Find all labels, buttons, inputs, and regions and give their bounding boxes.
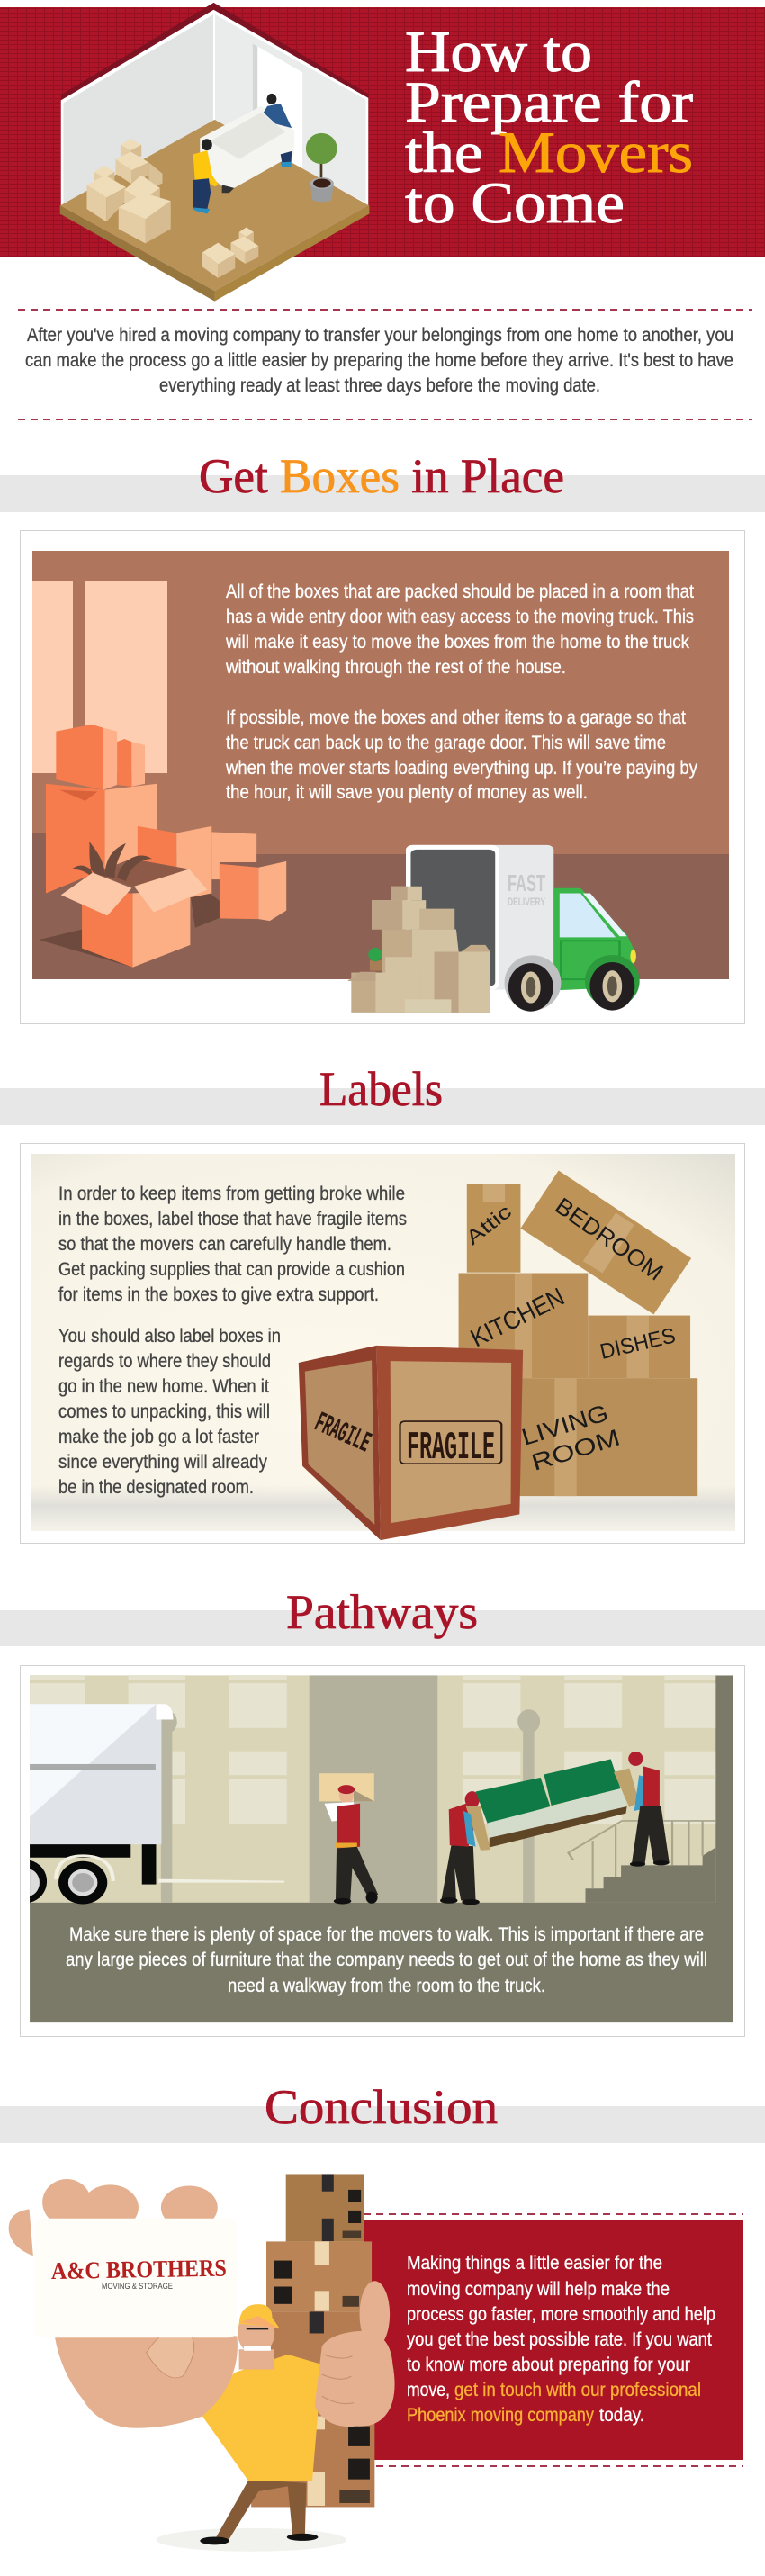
panel: conclusion callout (364, 2214, 743, 2466)
panel text: need a walkway from the room to the truck. (228, 1976, 545, 1996)
icon: hand holding card (9, 2179, 238, 2428)
heading: Labels: Labels (320, 1062, 443, 1116)
header band (0, 7, 765, 257)
panel: pathways (20, 1665, 745, 2036)
panel text: make the job go a lot faster (58, 1427, 259, 1447)
panel: labels (20, 1143, 745, 1543)
intro dashed rules (18, 310, 752, 419)
panel text: Get packing supplies that can provide a cushion (58, 1259, 405, 1280)
callout text: to know more about preparing for your (407, 2355, 690, 2375)
title: the Movers (405, 121, 693, 185)
title: Prepare for (405, 70, 693, 135)
icon: box tower (251, 2174, 374, 2507)
illustration: delivery truck (406, 845, 640, 1012)
box handwriting: ROOM (528, 1424, 623, 1476)
icon: mover carrying a box (320, 1773, 378, 1904)
callout text: you get the best possible rate. If you want (407, 2329, 712, 2350)
truck lettering (508, 869, 545, 908)
illustration: labelled boxes (299, 1170, 698, 1540)
icon: moving truck (30, 1704, 284, 1904)
panel text: regards to where they should (58, 1351, 271, 1372)
box handwriting: BEDROOM (551, 1192, 669, 1286)
icon: movers carrying green sofa (440, 1752, 670, 1905)
box handwriting: KITCHEN (466, 1283, 569, 1352)
heading band: Get Boxes in Place (0, 475, 765, 512)
truck lettering: DELIVERY (508, 896, 545, 908)
title (405, 20, 693, 236)
panel text: so that the movers can carefully handle them. (58, 1234, 392, 1255)
callout text (407, 2253, 716, 2426)
panel text: will make it easy to move the boxes from the home to the truck (225, 632, 689, 653)
icon: mover in yellow shirt (193, 139, 219, 213)
illustration: cardboard stack (347, 887, 490, 1013)
panel text (225, 581, 698, 803)
illustration: orange boxes (39, 725, 286, 968)
panel text (66, 1924, 707, 1996)
panel text: since everything will already (58, 1452, 267, 1473)
illustration: isometric room with movers (60, 3, 369, 302)
icon: stairs and railing (569, 1821, 716, 1903)
panel text: go in the new home. When it (58, 1376, 269, 1397)
heading: Get Boxes in Place: Get Boxes in Place (199, 449, 564, 503)
box handwriting: LIVING (518, 1399, 611, 1451)
panel text: for items in the boxes to give extra support. (58, 1284, 379, 1305)
callout text: get in touch with our professional (454, 2380, 701, 2400)
heading: Conclusion: Conclusion (265, 2080, 498, 2134)
callout text: process go faster, more smoothly and help (407, 2304, 716, 2325)
callout text: Making things a little easier for the (407, 2253, 662, 2274)
panel text (58, 1184, 407, 1498)
panel text: in the boxes, label those that have fragile items (58, 1209, 407, 1229)
logo text: A&C BROTHERS (51, 2255, 227, 2284)
panel text: All of the boxes that are packed should be placed in a room that (226, 581, 694, 602)
panel text: If possible, move the boxes and other items to a garage so that (226, 707, 686, 728)
panel text: the truck can back up to the garage door. This will save time (226, 733, 666, 753)
panel text: when the mover starts loading everything up. If you’re paying by (225, 758, 698, 779)
box handwriting (462, 1192, 678, 1476)
intro text (25, 325, 734, 396)
panel text: comes to unpacking, this will (58, 1401, 270, 1422)
title: How to (405, 20, 592, 85)
icon: potted plant (306, 133, 338, 202)
heading band: Pathways (0, 1610, 765, 1646)
windows (32, 581, 167, 773)
heading band: Conclusion (0, 2106, 765, 2143)
illustration: mover with business card and boxes (9, 2174, 395, 2552)
panel text: You should also label boxes in (58, 1326, 281, 1347)
fragile stencils: FRAGILE (310, 1406, 375, 1460)
icon: thumbs up (315, 2281, 395, 2427)
heading: Pathways: Pathways (286, 1585, 478, 1639)
icon: sofa (200, 106, 294, 193)
panel text: be in the designated room. (58, 1477, 254, 1498)
fragile stencils: FRAGILE (407, 1426, 495, 1471)
icon: front boxes (202, 227, 258, 278)
panel text: has a wide entry door with easy access to the moving truck. This (226, 607, 694, 627)
box handwriting: Attic (462, 1200, 516, 1249)
business card (34, 2219, 237, 2337)
callout text: moving company will help make the (407, 2279, 670, 2300)
panel text: without walking through the rest of the house. (225, 657, 566, 678)
callout text: today. (599, 2405, 644, 2426)
icon: cardboard box stack (86, 139, 171, 243)
illustration: street scene (30, 1675, 734, 2022)
panel text: the hour, it will save you plenty of money as well. (226, 782, 588, 803)
truck lettering: FAST (508, 869, 545, 896)
icon: street lamps (155, 1709, 540, 1903)
heading band: Labels (0, 1088, 765, 1125)
intro text: everything ready at least three days before the moving date. (159, 375, 600, 396)
panel text: In order to keep items from getting broke while (58, 1184, 405, 1204)
icon: mover in blue shirt (264, 94, 292, 167)
logo text: MOVING & STORAGE (102, 2282, 173, 2291)
fragile stencils (310, 1406, 495, 1471)
icon: mover figure (200, 2304, 322, 2544)
box handwriting: DISHES (598, 1323, 678, 1365)
callout text: move, (407, 2380, 450, 2400)
panel: get boxes in place (20, 531, 745, 1024)
callout text: Phoenix moving company (407, 2405, 594, 2426)
title: to Come (405, 171, 625, 236)
